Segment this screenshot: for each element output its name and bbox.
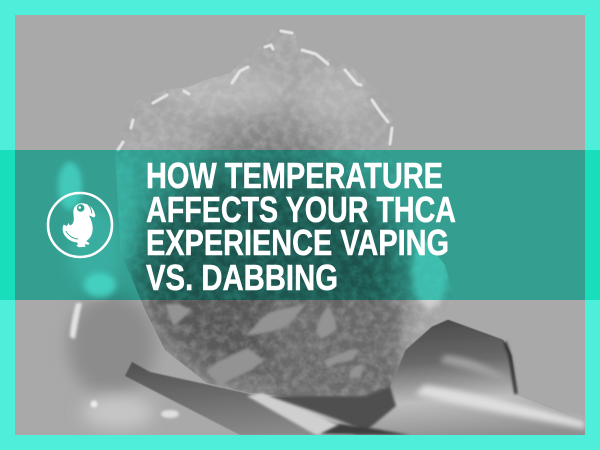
blurred glassy melt, left side <box>58 162 179 429</box>
title <box>146 155 456 298</box>
teal title band <box>0 150 600 300</box>
crystal lump <box>116 29 451 397</box>
dab tool blade <box>125 320 585 435</box>
title: VS. DABBING <box>146 257 338 298</box>
title: EXPERIENCE VAPING <box>146 222 449 263</box>
title: AFFECTS YOUR THCA <box>146 189 456 230</box>
icon: puffin logo in circle <box>48 193 112 257</box>
crystal edge highlights <box>118 31 392 150</box>
lighter surface patches <box>165 303 364 386</box>
title: HOW TEMPERATURE <box>146 155 443 196</box>
